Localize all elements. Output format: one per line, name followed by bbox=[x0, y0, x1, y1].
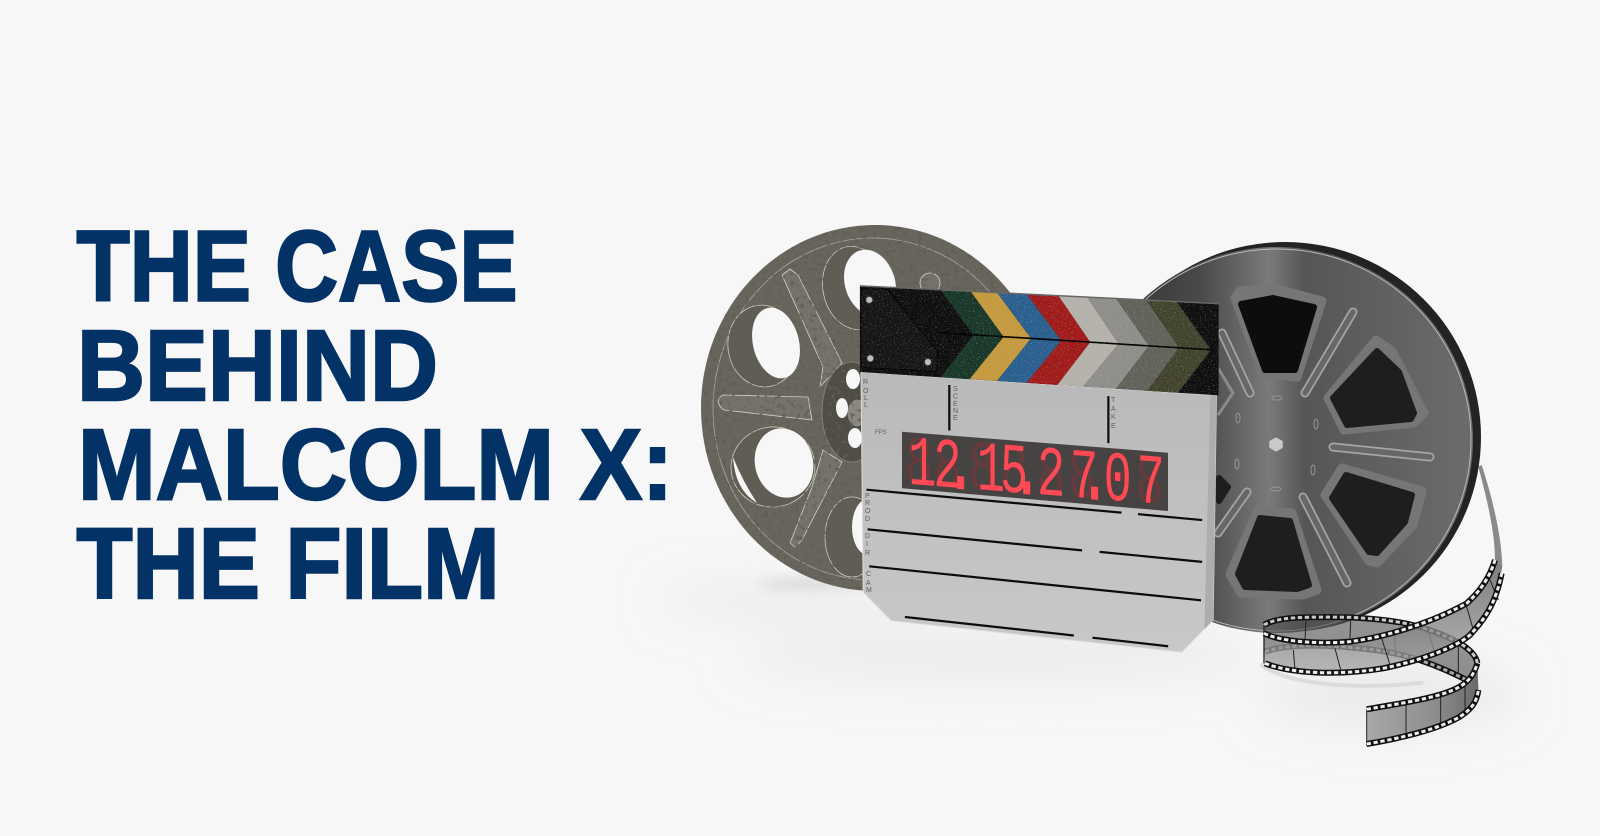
timecode display bbox=[902, 426, 1168, 526]
clapperboard labels: DIR bbox=[865, 533, 870, 557]
clapperboard labels: CAM bbox=[866, 571, 872, 594]
hinge plate bbox=[861, 289, 938, 372]
front band bbox=[1264, 560, 1502, 673]
hole frames bbox=[723, 240, 895, 577]
clapperboard bbox=[860, 286, 1219, 652]
spokes bbox=[1218, 312, 1430, 583]
dark windows bbox=[1219, 298, 1414, 589]
clapperboard labels bbox=[863, 379, 1116, 594]
tail bbox=[1367, 663, 1478, 745]
unlit digits: 88888888 bbox=[905, 426, 1163, 526]
display panel bbox=[902, 432, 1168, 511]
slate side edge bbox=[1204, 395, 1216, 629]
stick wear bbox=[860, 286, 1219, 395]
shadow under the loop bbox=[1261, 664, 1423, 686]
strip rising from reel bbox=[1478, 465, 1502, 567]
contact shadow of left reel bbox=[758, 581, 862, 587]
reel wear bbox=[701, 225, 1008, 590]
slate rules bbox=[866, 385, 1202, 646]
left film reel bbox=[701, 225, 1010, 590]
title bbox=[76, 210, 673, 620]
clapperboard labels: FPS bbox=[875, 430, 887, 436]
right film reel bbox=[1081, 242, 1481, 633]
rear band edges bbox=[1264, 617, 1477, 680]
lit digits: 12.15.27.07 bbox=[908, 426, 1165, 526]
film strip bbox=[1261, 465, 1502, 746]
title: MALCOLM X: bbox=[78, 409, 673, 521]
clapperboard labels: PROD bbox=[865, 493, 871, 523]
floor shadows bbox=[660, 588, 1520, 727]
title: THE FILM bbox=[76, 508, 500, 620]
title: BEHIND bbox=[77, 310, 438, 422]
clapperboard labels: TAKE bbox=[1111, 397, 1116, 430]
holes bbox=[733, 243, 904, 555]
title: THE CASE bbox=[76, 210, 518, 322]
rear band bbox=[1264, 617, 1478, 690]
illustration: film reels and clapperboard bbox=[660, 224, 1520, 746]
hub details bbox=[1269, 437, 1283, 452]
window frames bbox=[1230, 289, 1424, 595]
clapperboard labels: SCENE bbox=[953, 386, 958, 422]
slate body bbox=[861, 372, 1216, 652]
clapperboard labels: ROLL bbox=[863, 379, 869, 409]
spokes bbox=[718, 269, 940, 547]
clap stick bbox=[860, 286, 1219, 395]
front edges and frames bbox=[1264, 560, 1502, 746]
hub recess bbox=[822, 362, 882, 462]
